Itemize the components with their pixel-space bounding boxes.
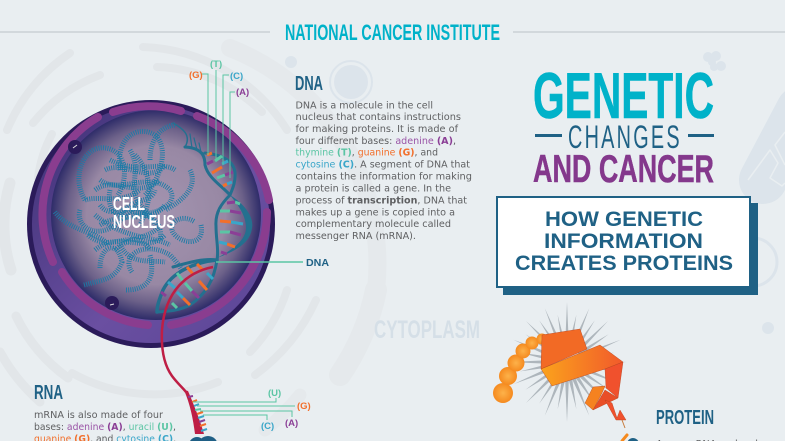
DNA description <box>296 100 472 242</box>
DNA base callouts <box>189 59 249 178</box>
heading: RNA: RNA <box>34 382 63 404</box>
RNA description <box>34 410 176 441</box>
illustration: cell nucleus <box>27 59 329 434</box>
title <box>533 59 714 191</box>
RNA base callouts: (C) <box>261 421 274 432</box>
subtitle box <box>497 197 758 295</box>
header: National Cancer Institute: NATIONAL CANCER INSTITUTE <box>285 20 500 45</box>
chromatin fibres <box>55 125 202 290</box>
ribosome <box>189 436 218 441</box>
sunburst rays <box>507 302 627 422</box>
DNA base callouts: (C) <box>230 71 243 82</box>
heading: DNA: DNA <box>295 73 323 95</box>
text block: DNA <box>295 73 472 242</box>
DNA base callouts: (A) <box>236 87 249 98</box>
DNA description: makes up a gene is copied into a <box>296 207 455 218</box>
text block: protein <box>656 407 764 441</box>
label: cell nucleus: CELL <box>113 194 145 214</box>
mRNA base ticks <box>188 396 207 431</box>
DNA description: thymine (T), guanine (G), and <box>296 148 438 159</box>
DNA description: process of transcription, DNA that <box>296 195 467 206</box>
heading: protein: PROTEIN <box>656 407 714 429</box>
RNA base callouts: (A) <box>285 418 298 429</box>
DNA description: a protein is called a gene. In the <box>296 184 451 195</box>
DNA description: four different bases: adenine (A), <box>296 136 456 147</box>
RNA description: mRNA is also made of four <box>34 410 164 421</box>
text block: RNA <box>34 382 176 441</box>
DNA description: contains the information for making <box>296 172 472 183</box>
mRNA bases and ribosome <box>188 388 311 441</box>
subtitle box: INFORMATION <box>544 230 703 253</box>
illustration: folded protein <box>493 302 627 428</box>
DNA pointer label: DNA <box>306 258 329 269</box>
mRNA strand <box>162 267 213 434</box>
subtitle box: HOW GENETIC <box>545 208 703 231</box>
label: cell nucleus: NUCLEUS <box>113 212 175 232</box>
DNA pointer label <box>216 258 329 269</box>
nuclear envelope <box>27 100 275 348</box>
DNA base callouts: (T) <box>210 59 222 70</box>
DNA description: for making proteins. It is made of <box>296 124 458 135</box>
subtitle box: CREATES PROTEINS <box>515 252 733 275</box>
ribosome detail near protein <box>622 435 639 441</box>
label: cytoplasm: CYTOPLASM <box>374 316 480 344</box>
RNA base callouts <box>193 388 311 432</box>
amino acid beads <box>493 334 563 403</box>
DNA description: cytosine (C). A segment of DNA that <box>296 160 470 171</box>
label: cell nucleus <box>113 194 175 232</box>
DNA base callouts: (G) <box>189 70 203 81</box>
DNA description: nucleus that contains instructions <box>296 112 461 123</box>
title: CHANGES <box>568 119 680 155</box>
DNA description: DNA is a molecule in the cell <box>296 100 433 111</box>
DNA description: complementary molecule called <box>296 219 451 230</box>
RNA base callouts: (G) <box>297 401 311 412</box>
RNA description: bases: adenine (A), uracil (U), <box>34 422 176 433</box>
RNA base callouts: (U) <box>268 388 281 399</box>
DNA double helix <box>157 123 252 312</box>
origami ribbon <box>541 329 626 428</box>
DNA description: messenger RNA (mRNA). <box>296 231 416 242</box>
